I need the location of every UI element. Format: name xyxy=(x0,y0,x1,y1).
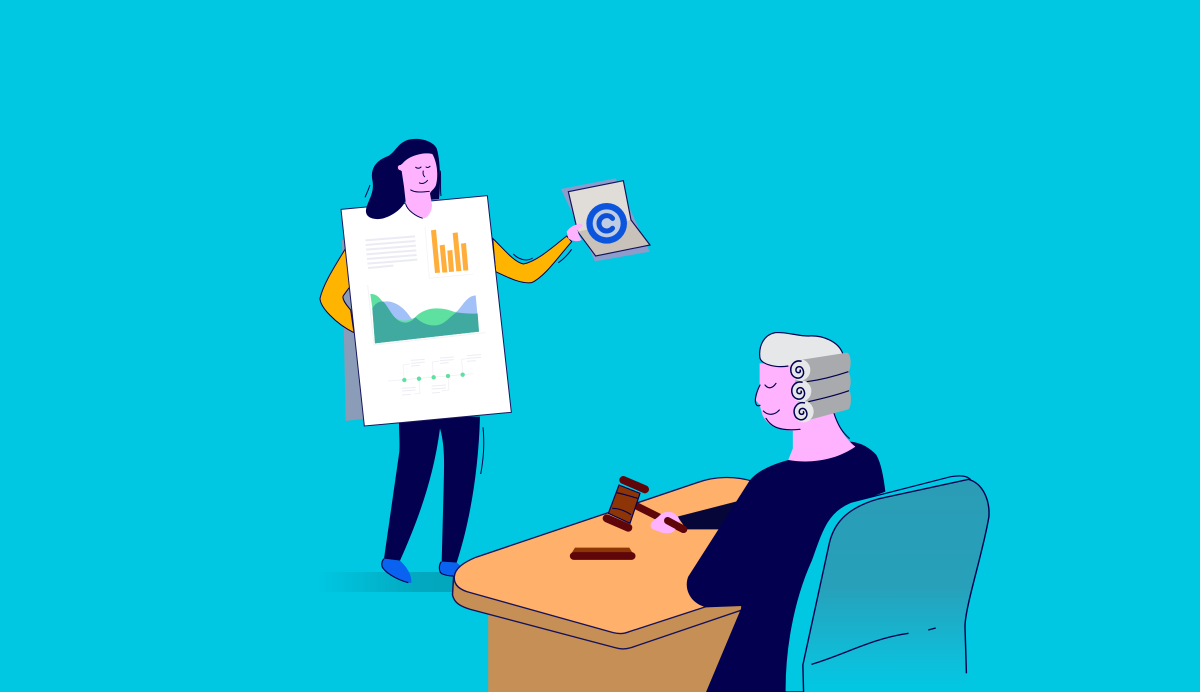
woman legs and shoes xyxy=(382,417,484,583)
right arm xyxy=(493,236,572,283)
gavel head xyxy=(608,485,640,523)
bar chart xyxy=(425,227,473,278)
curl two xyxy=(791,380,811,402)
face details xyxy=(365,164,441,218)
roll dividers xyxy=(807,372,849,402)
copyright symbol xyxy=(586,203,627,244)
gavel rest xyxy=(571,548,633,556)
desk edge xyxy=(452,577,742,649)
left arm xyxy=(320,249,354,333)
gavel xyxy=(607,480,684,533)
chair outlines xyxy=(803,479,989,692)
poster board xyxy=(341,196,511,426)
gavel handle end xyxy=(668,521,684,529)
floor shadow xyxy=(315,572,460,592)
area chart xyxy=(368,285,486,345)
poster text lines xyxy=(365,236,417,268)
hair xyxy=(366,139,440,219)
judge forearm xyxy=(677,501,738,529)
desk top xyxy=(454,477,752,634)
shoes xyxy=(382,559,462,583)
folder back xyxy=(561,178,650,261)
wig rolls xyxy=(793,353,851,421)
woman upper body with poster xyxy=(320,196,572,426)
folder lower page xyxy=(578,220,650,256)
motion lines arm xyxy=(513,249,572,263)
chair back panel xyxy=(803,479,989,692)
copyright folder xyxy=(561,178,650,261)
wig top xyxy=(760,333,843,367)
curl one xyxy=(790,359,810,381)
face and neck xyxy=(397,153,437,218)
legs xyxy=(384,417,480,563)
judge head and neck xyxy=(756,363,855,461)
motion line xyxy=(481,427,484,474)
grey backing panel xyxy=(342,240,365,421)
judge and desk scene xyxy=(452,363,989,692)
face details xyxy=(755,383,849,438)
judge body xyxy=(687,442,885,692)
curl three xyxy=(794,401,814,422)
gavel handle xyxy=(637,506,683,529)
hand xyxy=(567,224,583,241)
chair xyxy=(785,476,989,692)
judge hand xyxy=(651,512,679,533)
judge wig and face xyxy=(755,333,851,438)
folder upper page xyxy=(568,181,650,256)
desk front xyxy=(488,608,742,692)
timeline diagram xyxy=(388,355,481,395)
chair frame xyxy=(785,476,970,692)
woman head xyxy=(365,139,441,219)
